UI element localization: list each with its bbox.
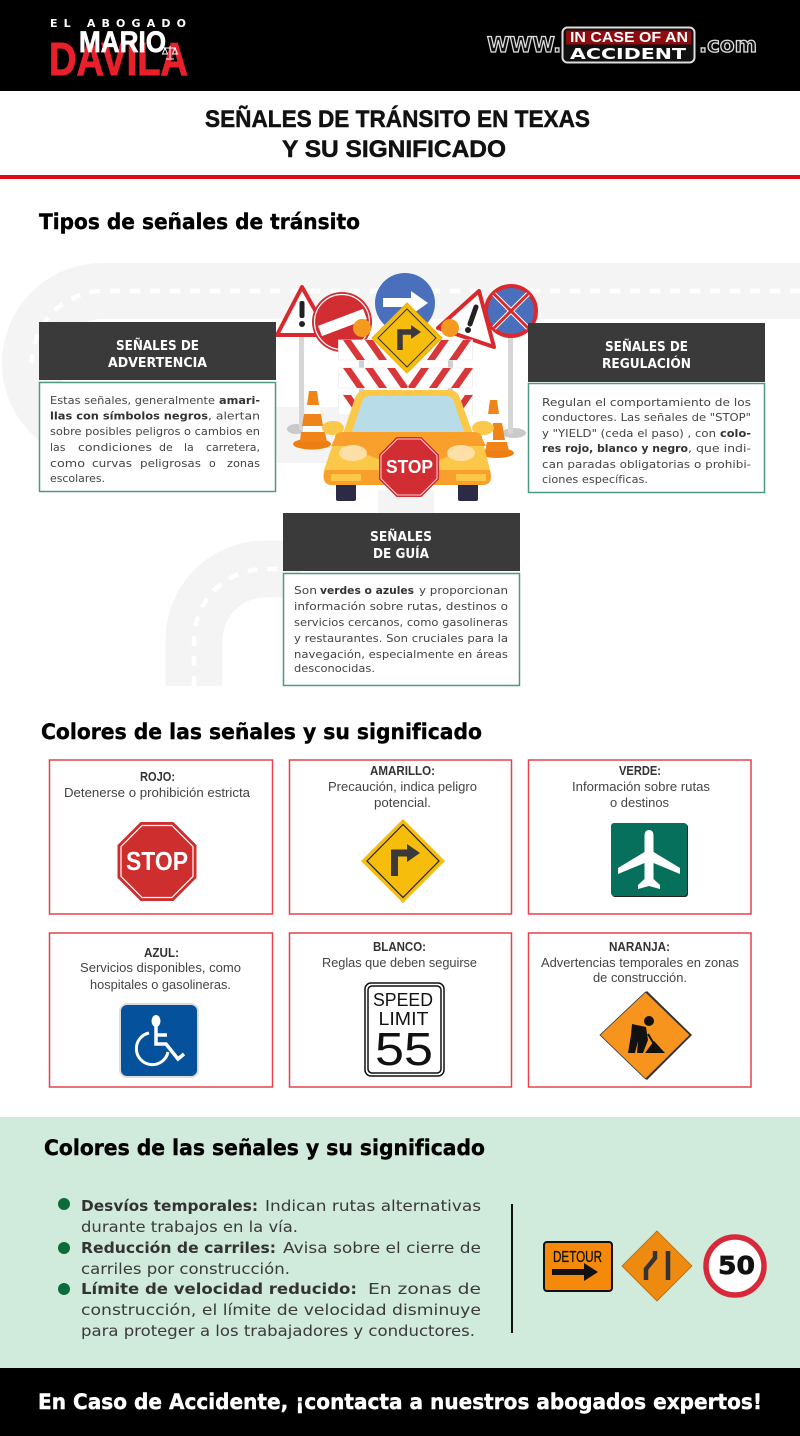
panel: señales de advertencia: carretera, — [206, 441, 260, 454]
card: naranja: Advertencias temporales en zonas — [541, 955, 739, 970]
panel: señales de regulación: SEÑALES DE — [605, 339, 688, 355]
sign posts — [287, 334, 526, 438]
panel: señales de guía: DE GUÍA — [373, 546, 429, 562]
panel: señales de advertencia: peligrosas — [140, 457, 201, 470]
icon: road work sign — [600, 991, 692, 1080]
panel: green section — [0, 1117, 800, 1368]
card: amarillo — [290, 760, 512, 914]
panel: señales de advertencia: como — [50, 457, 85, 470]
icon: yellow turn sign — [361, 819, 445, 903]
panel: señales de guía: desconocidas. — [294, 662, 375, 675]
panel: señales de guía — [283, 513, 520, 686]
panel: señales de guía: servicios cercanos, como gasolineras — [294, 616, 508, 629]
panel: señales de guía: información sobre rutas, destinos o — [294, 600, 508, 613]
panel: señales de advertencia: de — [159, 441, 173, 454]
logo: El Abogado Mario Davila — [49, 17, 188, 85]
car — [322, 390, 494, 501]
card: amarillo: Precaución, indica peligro — [328, 779, 477, 794]
bullet list: durante trabajos en la vía. — [81, 1218, 298, 1236]
panel: señales de regulación: conductores. Las señales de "STOP" — [542, 411, 751, 424]
background road pattern — [30, 291, 800, 686]
footer call to action — [0, 1368, 800, 1436]
card: azul: AZUL: — [144, 946, 179, 960]
card: naranja: NARANJA: — [609, 940, 670, 954]
panel: señales de guía: y proporcionan — [419, 584, 508, 597]
panel: señales de advertencia: las — [50, 441, 66, 454]
logo: www.incaseofanaccident.com: WWW. — [487, 33, 561, 57]
bullet list: Avisa sobre el cierre de — [283, 1239, 481, 1257]
panel: señales de regulación: ciones específicas. — [542, 473, 648, 486]
panel: señales de regulación: Regulan el comportamiento de los — [542, 396, 751, 409]
bullet list: En zonas de — [368, 1280, 481, 1298]
bullet list: Indican rutas alternativas — [265, 1197, 481, 1215]
panel: señales de advertencia: curvas — [92, 457, 132, 470]
logo: www.incaseofanaccident.com: .com — [699, 33, 757, 57]
bullet list: construcción, el límite de velocidad disminuye — [81, 1301, 481, 1319]
card: verde: VERDE: — [619, 764, 661, 778]
card: azul — [50, 933, 272, 1087]
card: azul: Servicios disponibles, como — [80, 960, 241, 975]
icon: speed 50 sign — [706, 1237, 764, 1295]
icon: green airport sign — [611, 823, 688, 897]
panel: señales de advertencia: ADVERTENCIA — [108, 356, 207, 371]
title: Y SU SIGNIFICADO — [282, 136, 506, 163]
card: verde: o destinos — [610, 795, 669, 810]
icon: speed limit sign: LIMIT — [378, 1009, 428, 1029]
panel: señales de regulación: can paradas obligatorias o prohibi- — [542, 458, 751, 471]
logo: El Abogado Mario Davila: MARIO — [79, 26, 166, 59]
panel: señales de regulación: , que indi- — [688, 442, 751, 455]
heading: tipos de señales: Tipos de señales de tránsito — [39, 210, 360, 234]
card: blanco — [290, 933, 512, 1087]
icon: accessibility sign — [120, 1004, 198, 1077]
panel: señales de advertencia: zonas — [227, 457, 260, 470]
card: amarillo: AMARILLO: — [370, 764, 435, 778]
icon: speed limit sign — [365, 983, 444, 1076]
card: rojo — [50, 760, 272, 914]
panel: señales de regulación: res rojo, blanco y negro — [542, 442, 688, 455]
card: blanco: Reglas que deben seguirse — [322, 955, 477, 970]
icon: right traffic cone — [480, 400, 514, 458]
icon: detour sign — [544, 1242, 612, 1291]
panel: señales de advertencia: Estas señales, generalmente — [50, 394, 215, 407]
panel: señales de regulación: colo- — [720, 427, 751, 440]
icon: right warning triangle — [438, 291, 494, 347]
icon: car stop sign: STOP — [386, 457, 433, 477]
icon: speed 50 sign: 50 — [718, 1251, 755, 1280]
bullet list: Reducción de carriles: — [81, 1239, 276, 1257]
title: SEÑALES DE TRÁNSITO EN TEXAS — [205, 105, 590, 133]
panel: señales de advertencia: SEÑALES DE — [116, 338, 199, 354]
icon: left traffic cone — [293, 391, 331, 450]
barrier — [338, 319, 473, 430]
icon: speed limit sign: SPEED — [373, 990, 433, 1010]
icon: blue arrow sign — [375, 273, 435, 333]
icon: speed limit sign: 55 — [375, 1023, 433, 1075]
card: rojo: ROJO: — [140, 770, 175, 784]
panel: señales de guía: y restaurantes. Son cruciales para la — [294, 632, 508, 645]
icon: detour sign: DETOUR — [553, 1249, 602, 1266]
icon: car stop sign — [379, 437, 439, 497]
logo: www.incaseofanaccident.com: ACCIDENT — [570, 45, 687, 63]
card: naranja — [528, 933, 751, 1087]
panel: señales de guía: navegación, especialmente en áreas — [294, 648, 508, 661]
icon: left warning triangle — [277, 287, 329, 335]
illustration: road signs, barrier and car — [277, 273, 536, 501]
icon: no entry sign — [312, 292, 372, 352]
icon: yellow turn diamond — [372, 303, 442, 373]
heading: colores de las señales: Colores de las señales y su significado — [41, 720, 482, 744]
icon: stop sign: STOP — [126, 846, 188, 876]
panel: señales de guía: SEÑALES — [370, 529, 432, 545]
bullet list: para proteger a los trabajadores y conductores. — [81, 1322, 475, 1340]
header bar — [0, 0, 800, 91]
panel: señales de advertencia: sobre posibles peligros o cambios en — [50, 425, 260, 438]
panel: señales de advertencia: llas con símbolos negros — [50, 410, 208, 422]
card: rojo: Detenerse o prohibición estricta — [64, 785, 251, 800]
logo: www.incaseofanaccident.com — [487, 28, 757, 63]
bullet list — [58, 1197, 481, 1340]
logo: El Abogado Mario Davila: DAVILA — [49, 33, 188, 85]
panel: señales de guía: Son — [294, 584, 317, 597]
card: verde: Información sobre rutas — [572, 779, 710, 794]
title — [205, 105, 590, 163]
panel: señales de regulación: y "YIELD" (ceda el paso) , con — [542, 427, 716, 440]
bullet list: carriles por construcción. — [81, 1260, 290, 1278]
footer call to action: En Caso de Accidente, ¡contacta a nuestros abogados expertos! — [38, 1390, 762, 1414]
card: blanco: BLANCO: — [373, 940, 426, 954]
panel: señales de regulación: REGULACIÓN — [602, 356, 691, 372]
panel: señales de advertencia: escolares. — [50, 472, 105, 485]
logo: www.incaseofanaccident.com: IN CASE OF AN — [570, 29, 688, 46]
icon: lane reduction sign — [622, 1231, 692, 1301]
panel: señales de advertencia — [39, 322, 276, 492]
panel: señales de advertencia: condiciones — [78, 441, 152, 454]
card: verde — [528, 760, 751, 914]
icon: no parking sign — [486, 286, 536, 336]
card: azul: hospitales o gasolineras. — [90, 977, 231, 992]
heading: green section: Colores de las señales y su significado — [44, 1136, 485, 1160]
panel: señales de regulación — [528, 323, 765, 492]
panel: señales de guía: verdes o azules — [320, 584, 414, 597]
bullet list: Límite de velocidad reducido: — [81, 1280, 357, 1298]
icon: stop sign — [118, 822, 196, 901]
panel: señales de advertencia: la — [184, 441, 194, 454]
panel: señales de advertencia: o — [209, 457, 216, 470]
card: amarillo: potencial. — [374, 795, 431, 810]
bullet list: Desvíos temporales: — [81, 1197, 258, 1215]
logo: El Abogado Mario Davila: EL ABOGADO — [50, 17, 186, 30]
panel: señales de advertencia: amari- — [219, 394, 260, 407]
panel: señales de advertencia: , alertan — [208, 410, 260, 422]
card: naranja: de construcción. — [593, 970, 687, 985]
